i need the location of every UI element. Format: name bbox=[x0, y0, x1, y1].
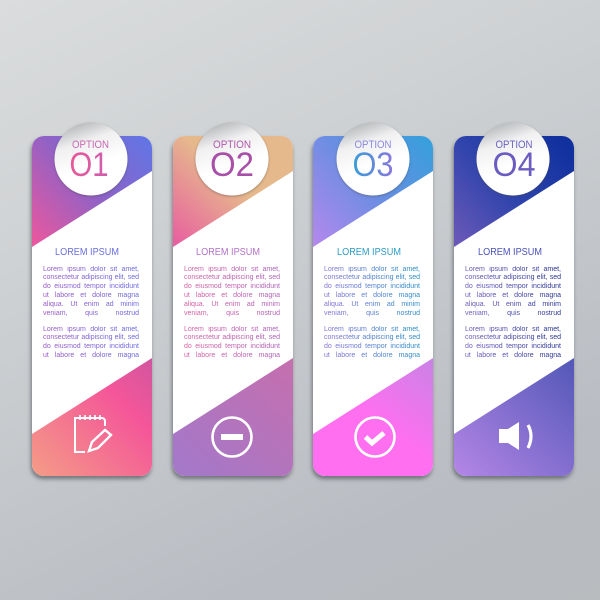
text block: second paragraph bbox=[324, 326, 420, 361]
heading: lorem ipsum: LOREM IPSUM bbox=[196, 246, 260, 258]
badge: option 4 bbox=[476, 122, 550, 196]
text block: first paragraph bbox=[43, 266, 139, 319]
text block: second paragraph bbox=[43, 326, 139, 361]
badge: option 3 bbox=[336, 122, 410, 196]
text block: second paragraph bbox=[465, 326, 561, 361]
heading: lorem ipsum: LOREM IPSUM bbox=[337, 246, 401, 258]
badge: option 4: OPTION bbox=[496, 139, 533, 151]
icon: minus in circle bbox=[212, 418, 252, 456]
badge: option 1: O1 bbox=[70, 146, 108, 184]
heading: lorem ipsum: LOREM IPSUM bbox=[478, 246, 542, 258]
icon: check mark in circle bbox=[356, 418, 394, 456]
text block: first paragraph bbox=[465, 266, 561, 319]
panel: option 1 card bbox=[28, 122, 154, 482]
badge: option 1 bbox=[54, 122, 128, 196]
badge: option 2: O2 bbox=[210, 146, 254, 184]
heading: lorem ipsum: LOREM IPSUM bbox=[55, 246, 119, 258]
badge: option 3: OPTION bbox=[354, 139, 392, 151]
text block: first paragraph bbox=[324, 266, 420, 319]
badge: option 3: O3 bbox=[352, 146, 394, 184]
badge: option 4: O4 bbox=[492, 146, 536, 184]
text block: second paragraph bbox=[184, 326, 280, 361]
panel: option 2 card bbox=[169, 122, 295, 482]
icon: speaker bbox=[499, 422, 531, 450]
icon: notepad and pencil bbox=[75, 415, 111, 452]
text block: first paragraph bbox=[184, 266, 280, 319]
panel: option 3 card bbox=[309, 122, 435, 482]
panel: option 4 card bbox=[450, 122, 576, 482]
badge: option 1: OPTION bbox=[72, 139, 109, 151]
badge: option 2 bbox=[196, 122, 268, 196]
badge: option 2: OPTION bbox=[213, 139, 251, 151]
